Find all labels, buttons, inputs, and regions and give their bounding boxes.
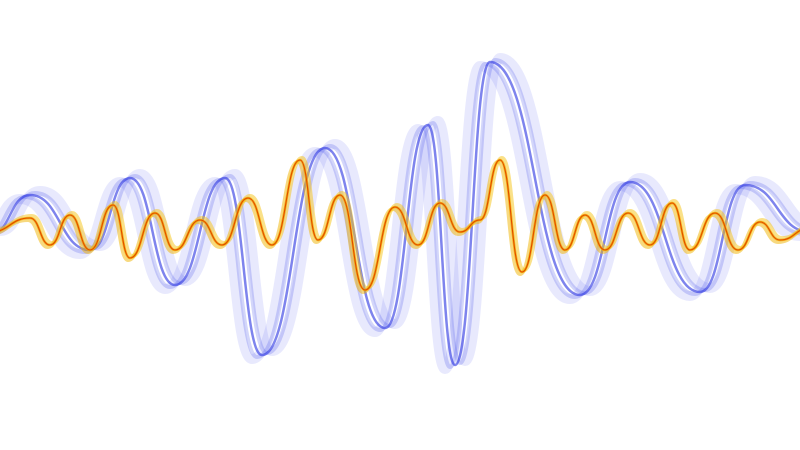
blue wave ribbon xyxy=(0,58,800,369)
orange wave ribbon xyxy=(0,158,800,292)
